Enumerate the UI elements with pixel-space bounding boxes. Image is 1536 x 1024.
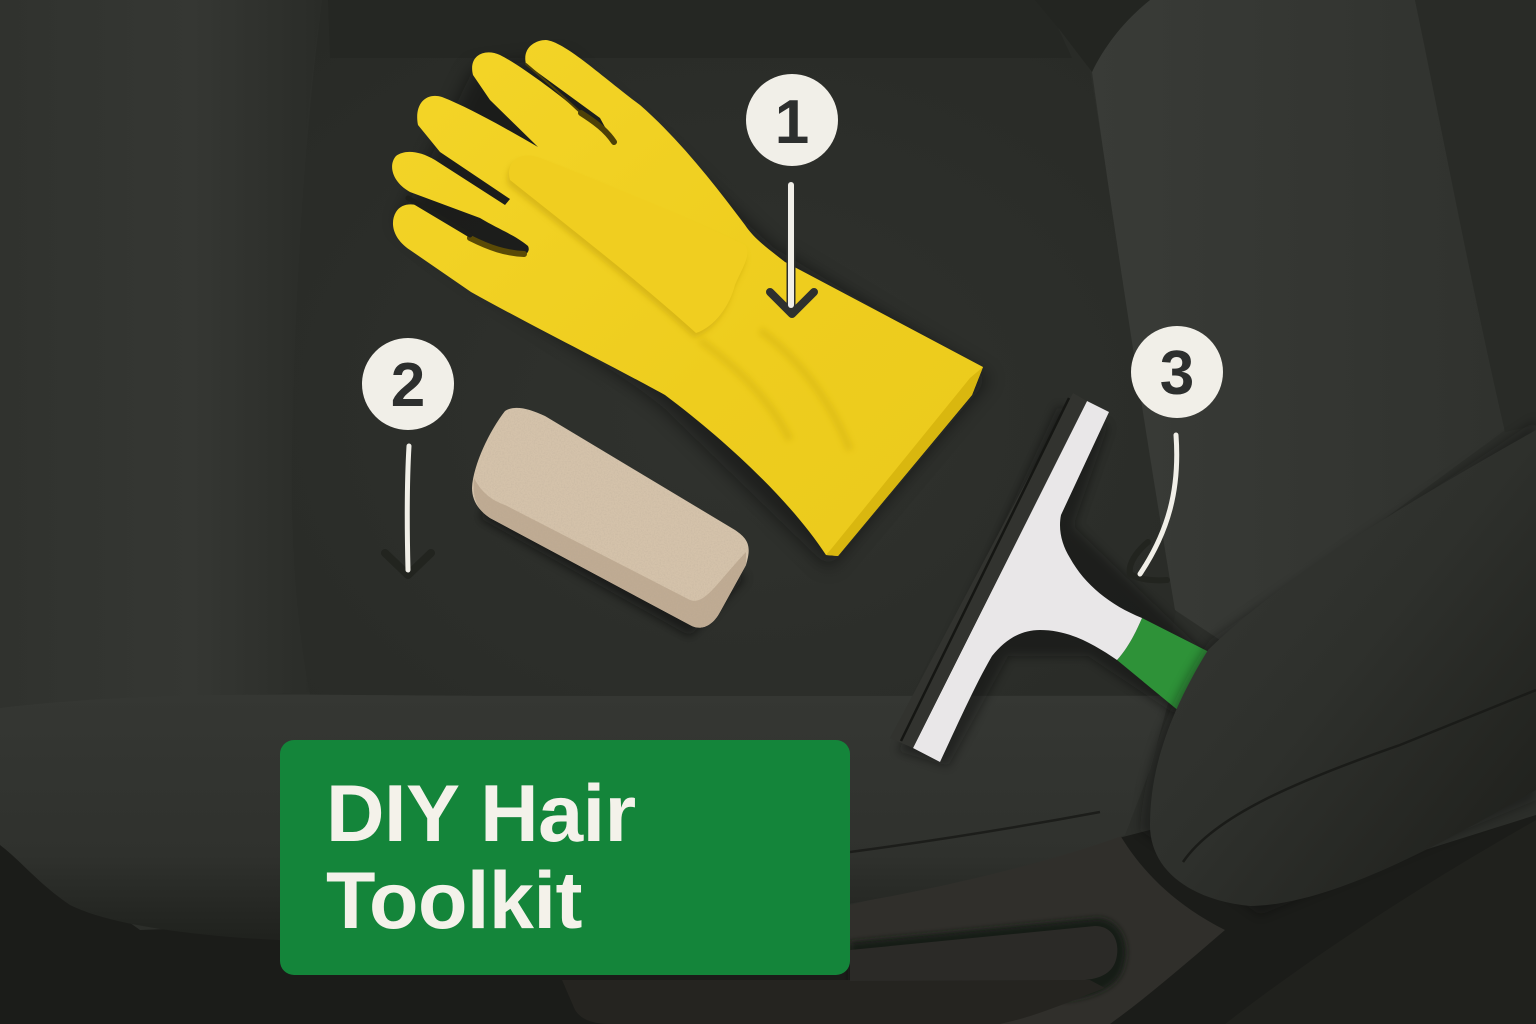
shadow: glove	[399, 58, 989, 568]
squeegee: blade groove	[901, 398, 1069, 741]
seat: bottom right floor	[1225, 820, 1536, 1024]
seat: top strip of cushion	[328, 0, 1072, 58]
shadow: armrest	[1140, 420, 1536, 915]
seat: side trim panel	[850, 835, 1225, 1024]
shadow: squeegee	[898, 406, 1208, 766]
seat: gap above lever	[850, 918, 1126, 1000]
glove: finger separation lines	[408, 64, 614, 254]
callout 3: number: 3	[1160, 339, 1194, 408]
squeegee: black rubber blade	[890, 393, 1087, 748]
callout 3	[1130, 326, 1223, 580]
glove: hand, fingers and cuff outline	[392, 40, 983, 556]
callout 1: number badge	[746, 74, 838, 166]
seat: armrest	[1150, 430, 1536, 906]
squeegee: white head and neck	[913, 401, 1142, 762]
seat: bolster stitch	[850, 812, 1100, 852]
seat: right bolster	[1092, 0, 1505, 640]
callout 1	[746, 74, 838, 314]
title text: DIY Hair	[326, 769, 636, 859]
pumice: speckle texture	[476, 422, 725, 582]
pumice: top face	[472, 408, 749, 628]
squeegee: green handle	[1117, 618, 1215, 712]
icon: pumice stone	[472, 408, 749, 628]
seat: top right corner	[1035, 0, 1150, 72]
seat: front bolster	[0, 695, 1170, 943]
glove: thumb	[509, 155, 747, 333]
shadow: pumice stone	[480, 428, 745, 636]
callout 2	[362, 338, 454, 575]
armrest: crease	[1183, 690, 1536, 862]
glove: thumb shadow	[507, 160, 745, 338]
pumice: front side	[474, 478, 746, 628]
title panel	[280, 740, 850, 975]
seat: lower dark area	[0, 815, 1536, 1024]
seat: area below lever	[562, 980, 1105, 1024]
callout 1: number: 1	[775, 88, 809, 157]
callout 2: number badge	[362, 338, 454, 430]
title text: Toolkit	[326, 856, 582, 946]
title text	[326, 769, 636, 946]
seat: centre cushion	[292, 0, 1180, 695]
icon: squeegee	[890, 393, 1215, 762]
seat: far right strip	[1415, 0, 1536, 432]
callout 2: arrow	[385, 446, 431, 575]
callout 2: number: 2	[391, 351, 425, 420]
glove: wrist folds	[700, 330, 850, 450]
seat: adjustment lever	[850, 926, 1117, 981]
icon: yellow rubber glove	[392, 40, 983, 556]
callout 3: arrow	[1130, 435, 1177, 580]
glove: cuff edge	[826, 367, 983, 556]
seat: left bolster	[0, 0, 322, 708]
callout 1: arrow	[770, 185, 814, 314]
callout 3: number badge	[1131, 326, 1223, 418]
